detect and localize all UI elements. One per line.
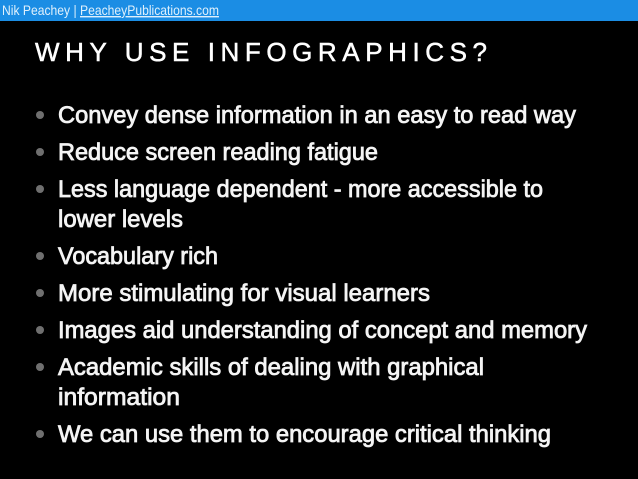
bullet 3: lower levels (58, 206, 183, 233)
bullet 1: Convey dense information in an easy to read way (58, 102, 576, 129)
top attribution bar: Nik Peachey | PeacheyPublications.com (2, 2, 219, 18)
bullet list (36, 102, 587, 448)
bullet 8: We can use them to encourage critical thinking (58, 421, 551, 448)
top attribution bar (0, 0, 638, 21)
bullet 7 (36, 354, 484, 411)
bullet 7: Academic skills of dealing with graphical (58, 354, 484, 381)
bullet 3 (36, 176, 543, 233)
title: WHY USE INFOGRAPHICS? (35, 37, 487, 67)
bullet 3: Less language dependent - more accessible to (58, 176, 543, 203)
bullet 5: More stimulating for visual learners (58, 280, 430, 307)
bullet 2: Reduce screen reading fatigue (58, 139, 378, 166)
bullet 4: Vocabulary rich (58, 243, 218, 270)
bullet 6: Images aid understanding of concept and memory (58, 317, 587, 344)
bullet 7: information (58, 384, 180, 411)
